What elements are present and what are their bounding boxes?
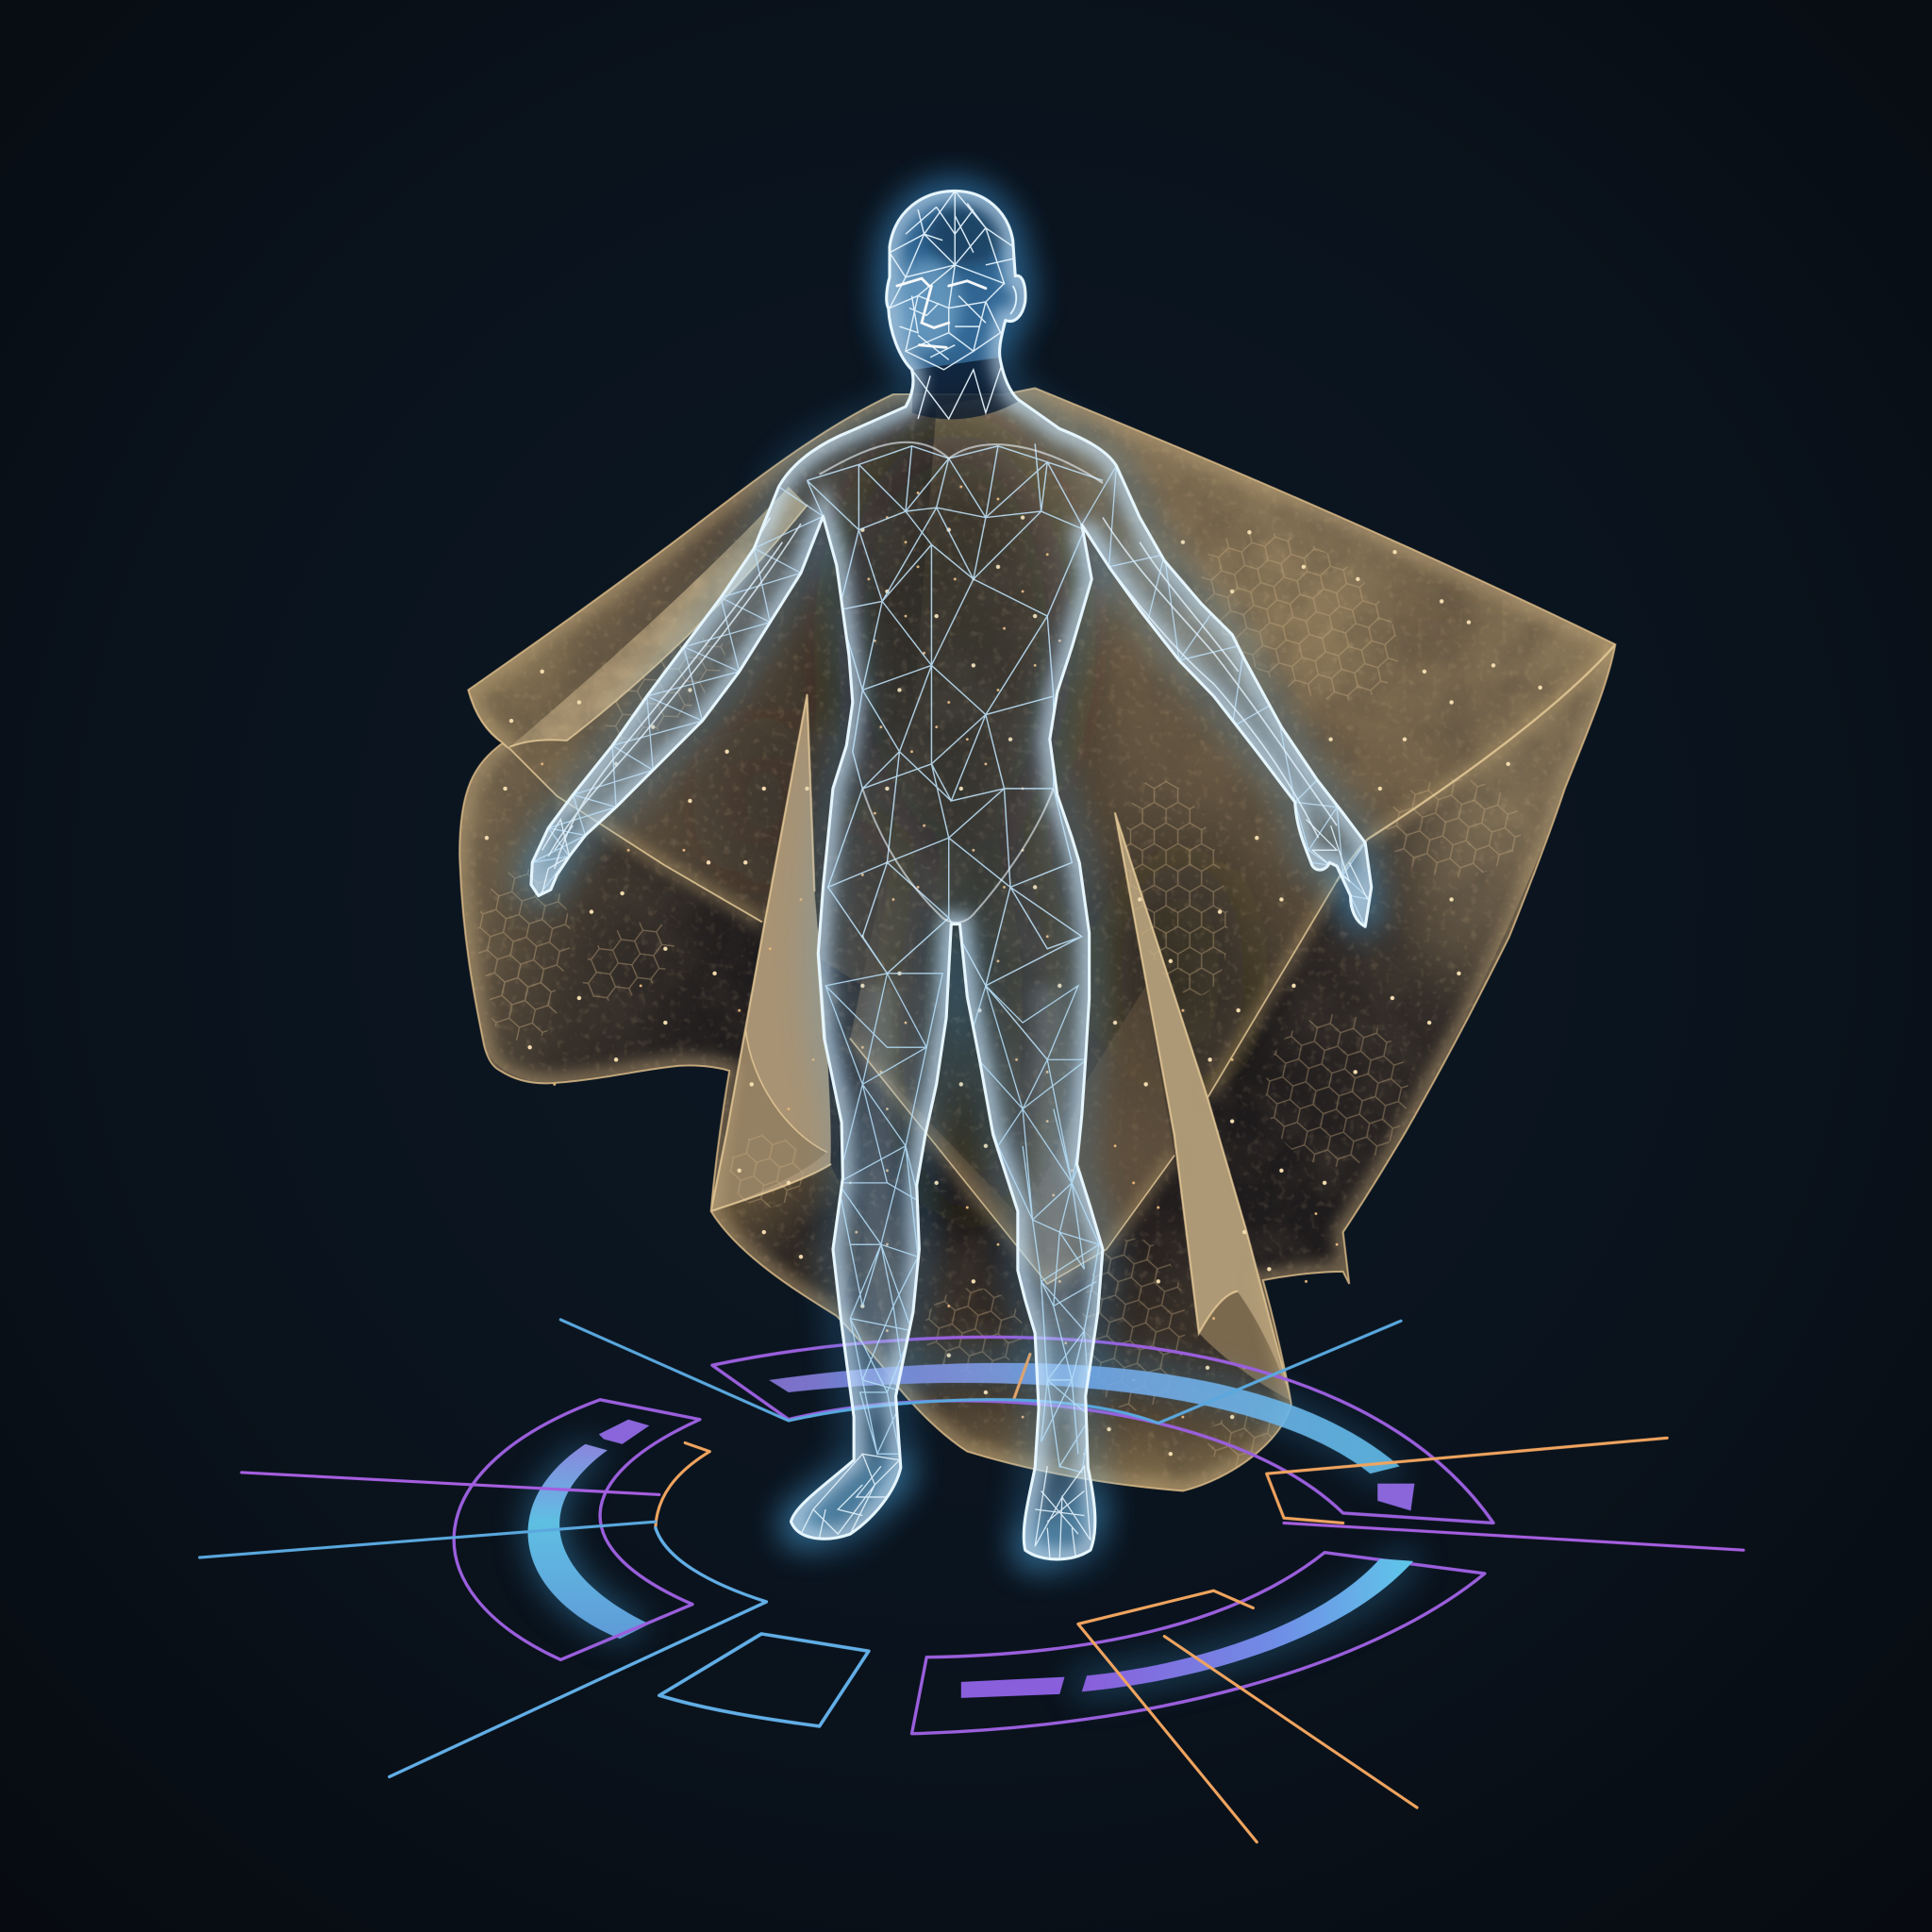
lower blue quad xyxy=(659,1634,869,1726)
dark neck xyxy=(912,358,1018,419)
dark crown xyxy=(928,202,1007,266)
cape fine dots xyxy=(542,487,1337,1454)
outer blue glow xyxy=(531,191,1372,1559)
central light V panel xyxy=(850,986,1174,1284)
outer rim glow xyxy=(459,388,1615,1491)
upper left flap xyxy=(469,395,936,985)
top right tab xyxy=(1377,1484,1414,1510)
left purple tab xyxy=(599,1420,649,1444)
top bar glow xyxy=(906,1363,1386,1473)
cape sparkle dots xyxy=(487,518,1541,1454)
cape base silhouette xyxy=(459,388,1615,1491)
right purple ray xyxy=(1284,1523,1743,1550)
limb haze xyxy=(579,542,1331,1417)
right arm mesh xyxy=(1082,466,1370,926)
bottom panel xyxy=(881,1259,1291,1491)
bottom purple outline xyxy=(912,1553,1485,1734)
squiggle grain xyxy=(467,406,1589,1477)
left blue glow xyxy=(528,1444,649,1639)
bottom orange rays xyxy=(1078,1591,1417,1842)
right lower panel xyxy=(1302,647,1615,1102)
torso mesh xyxy=(808,443,1103,1059)
left curl shadow xyxy=(711,1164,862,1316)
chest and groin contour highlights xyxy=(820,442,1103,923)
left arm long strands xyxy=(548,518,801,869)
bottom bar glow xyxy=(1084,1562,1405,1683)
hexagon patches xyxy=(476,497,1522,1469)
light left sheet xyxy=(711,695,831,1211)
leg mesh xyxy=(825,974,1099,1473)
cape xyxy=(443,370,1626,1503)
translucent body fill xyxy=(531,191,1372,1559)
top purple sector outline xyxy=(712,1337,1493,1523)
left orange tick xyxy=(656,1442,709,1528)
right orange bracket xyxy=(1267,1438,1667,1523)
right band curl xyxy=(1199,1291,1291,1401)
fold glows xyxy=(557,644,1615,1284)
top gradient bar xyxy=(769,1363,1400,1474)
left blue arc and ray xyxy=(390,1528,766,1776)
left purple ray xyxy=(242,1473,659,1494)
ground HUD rings xyxy=(200,1320,1743,1842)
face features xyxy=(897,278,986,347)
lower left panel xyxy=(460,744,692,1082)
inner clipped shading and mesh xyxy=(531,191,1372,1559)
hand glow xyxy=(536,838,1361,918)
left sheet inner fold xyxy=(711,1029,826,1211)
mottled texture xyxy=(462,426,1600,1479)
cape folds xyxy=(443,370,1626,1503)
bottom purple tab xyxy=(961,1677,1064,1698)
body outline xyxy=(531,191,1372,1559)
left blue ray xyxy=(200,1522,656,1557)
top arc segment xyxy=(560,1320,1743,1550)
feet glow xyxy=(801,1473,1084,1550)
foot mesh xyxy=(801,1454,1091,1558)
soft light and shadow patches xyxy=(715,431,1565,1220)
right arm long strands xyxy=(1091,518,1337,838)
left gradient bar xyxy=(528,1444,649,1639)
left arc segment xyxy=(200,1400,766,1776)
ear xyxy=(1010,286,1016,314)
left light band xyxy=(510,487,808,747)
bright fold edges xyxy=(468,506,1615,1401)
left purple sector outline xyxy=(454,1400,700,1659)
inner edge glow xyxy=(531,191,1372,1559)
bottom right arc segment xyxy=(912,1553,1485,1842)
wireframe human figure xyxy=(531,182,1372,1559)
top blue arc and rays xyxy=(560,1320,1401,1424)
light right band xyxy=(1115,813,1288,1392)
head glow xyxy=(881,182,1024,379)
cape outline xyxy=(459,388,1615,1491)
small orange tick xyxy=(1014,1354,1030,1398)
left arm mesh xyxy=(532,487,823,896)
central right panel xyxy=(850,388,1615,1284)
hand mesh xyxy=(542,820,1368,899)
head mesh xyxy=(890,191,1013,419)
bottom gradient bar xyxy=(1082,1558,1413,1691)
face light xyxy=(892,258,961,353)
